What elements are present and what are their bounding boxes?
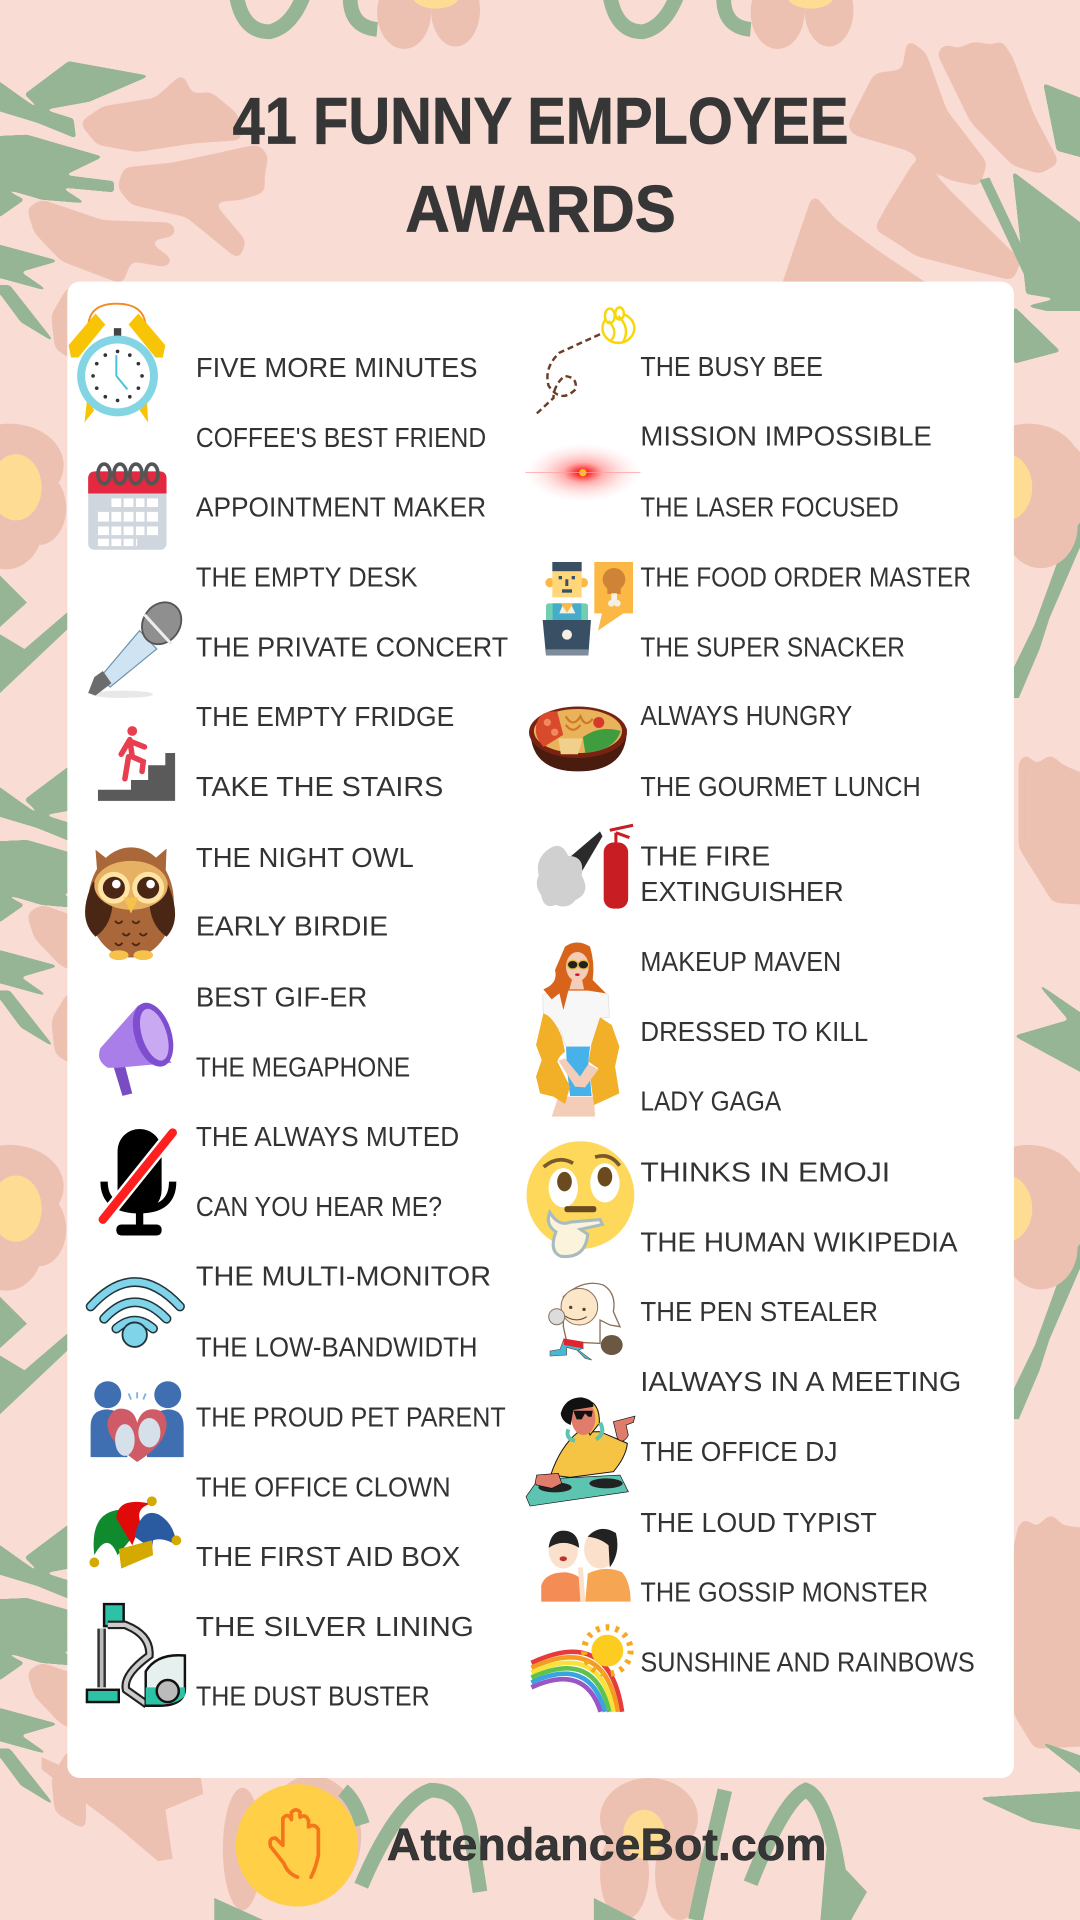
icon: vacuum cleaner [87, 1604, 185, 1706]
icon: alarm clock [69, 304, 165, 422]
icon: microphone [88, 595, 189, 698]
icon: muted microphone [103, 1129, 173, 1236]
right column award list: IALWAYS IN A MEETING [640, 1366, 961, 1397]
icon: noodle bowl [529, 707, 627, 771]
left column award list: THE PROUD PET PARENT [196, 1402, 506, 1433]
icon: wifi signal [91, 1282, 180, 1347]
right column award list: THE GOSSIP MONSTER [640, 1577, 928, 1608]
right column award list: THE PEN STEALER [640, 1296, 878, 1327]
icon: man at laptop with chicken speech bubble [543, 562, 633, 655]
right column award list: THE HUMAN WIKIPEDIA [640, 1226, 958, 1257]
icon: owl [85, 847, 175, 960]
icon: bee with dotted trail [536, 307, 634, 414]
left column award list: TAKE THE STAIRS [196, 771, 443, 802]
right column award list: THE FOOD ORDER MASTER [640, 562, 971, 593]
icon: jester hat [89, 1496, 181, 1569]
left column award list: THE DUST BUSTER [196, 1681, 430, 1712]
right column award list: THE OFFICE DJ [640, 1436, 838, 1467]
icon: person climbing stairs [98, 726, 175, 801]
right column award list [640, 351, 975, 1677]
right column award list: DRESSED TO KILL [640, 1016, 868, 1047]
left column award list: THE LOW-BANDWIDTH [196, 1332, 478, 1363]
left column award list: BEST GIF-ER [196, 982, 367, 1013]
left column award list: THE OFFICE CLOWN [196, 1471, 451, 1502]
white content card [67, 282, 1014, 1778]
right column award list: LADY GAGA [640, 1086, 781, 1117]
right column award list: MAKEUP MAVEN [640, 946, 841, 977]
title: 41 FUNNY EMPLOYEE [233, 84, 849, 158]
right column award list: THINKS IN EMOJI [640, 1157, 890, 1188]
left column award list: COFFEE'S BEST FRIEND [196, 422, 486, 453]
left column award list: THE FIRST AID BOX [196, 1541, 461, 1572]
icon: fire extinguisher spraying foam [537, 825, 633, 909]
right column award list: THE GOURMET LUNCH [640, 771, 921, 802]
left column award list: FIVE MORE MINUTES [196, 352, 478, 383]
left column award list: CAN YOU HEAR ME? [196, 1191, 442, 1222]
left column award list: APPOINTMENT MAKER [196, 492, 486, 523]
title [233, 84, 849, 246]
left column award list: THE SILVER LINING [196, 1611, 474, 1642]
right column award list: THE LASER FOCUSED [640, 492, 899, 523]
icon: red laser glow [525, 443, 640, 502]
left column award list: THE EMPTY DESK [196, 562, 418, 593]
title: AWARDS [405, 172, 676, 246]
icon: purple megaphone [99, 998, 181, 1096]
left column award list: EARLY BIRDIE [196, 911, 388, 942]
right column award list: EXTINGUISHER [640, 876, 844, 907]
left column award list: THE ALWAYS MUTED [196, 1121, 459, 1152]
right column award list: MISSION IMPOSSIBLE [640, 421, 932, 452]
right column award list: THE SUPER SNACKER [640, 631, 905, 662]
icon: pen stealer character [549, 1283, 623, 1360]
left column award list: THE NIGHT OWL [196, 842, 414, 873]
icon: DJ with turntable [526, 1397, 635, 1506]
icon: raised hand [270, 1810, 318, 1877]
left column award list: THE MULTI-MONITOR [196, 1261, 491, 1292]
left column award list: THE MEGAPHONE [196, 1051, 410, 1082]
icon: thinking emoji [527, 1141, 634, 1257]
icon: two boys whispering [541, 1529, 631, 1602]
icon: rainbow with sun [531, 1627, 631, 1712]
left column award list: THE PRIVATE CONCERT [196, 631, 508, 662]
left column award list [196, 352, 508, 1712]
right column award list: THE BUSY BEE [640, 351, 823, 382]
right column award list: SUNSHINE AND RAINBOWS [640, 1646, 975, 1677]
right column award list: ALWAYS HUNGRY [640, 700, 852, 731]
icon: calendar [88, 464, 167, 550]
left column award list: THE EMPTY FRIDGE [196, 701, 454, 732]
icon: woman in yellow jacket [536, 942, 619, 1117]
footer logo: yellow circle with hand [236, 1784, 358, 1907]
right column award list: THE FIRE [640, 841, 770, 872]
right column award list: THE LOUD TYPIST [640, 1507, 877, 1538]
footer brand name: AttendanceBot.com [387, 1819, 827, 1870]
icon: parents with pet heart [91, 1381, 184, 1462]
